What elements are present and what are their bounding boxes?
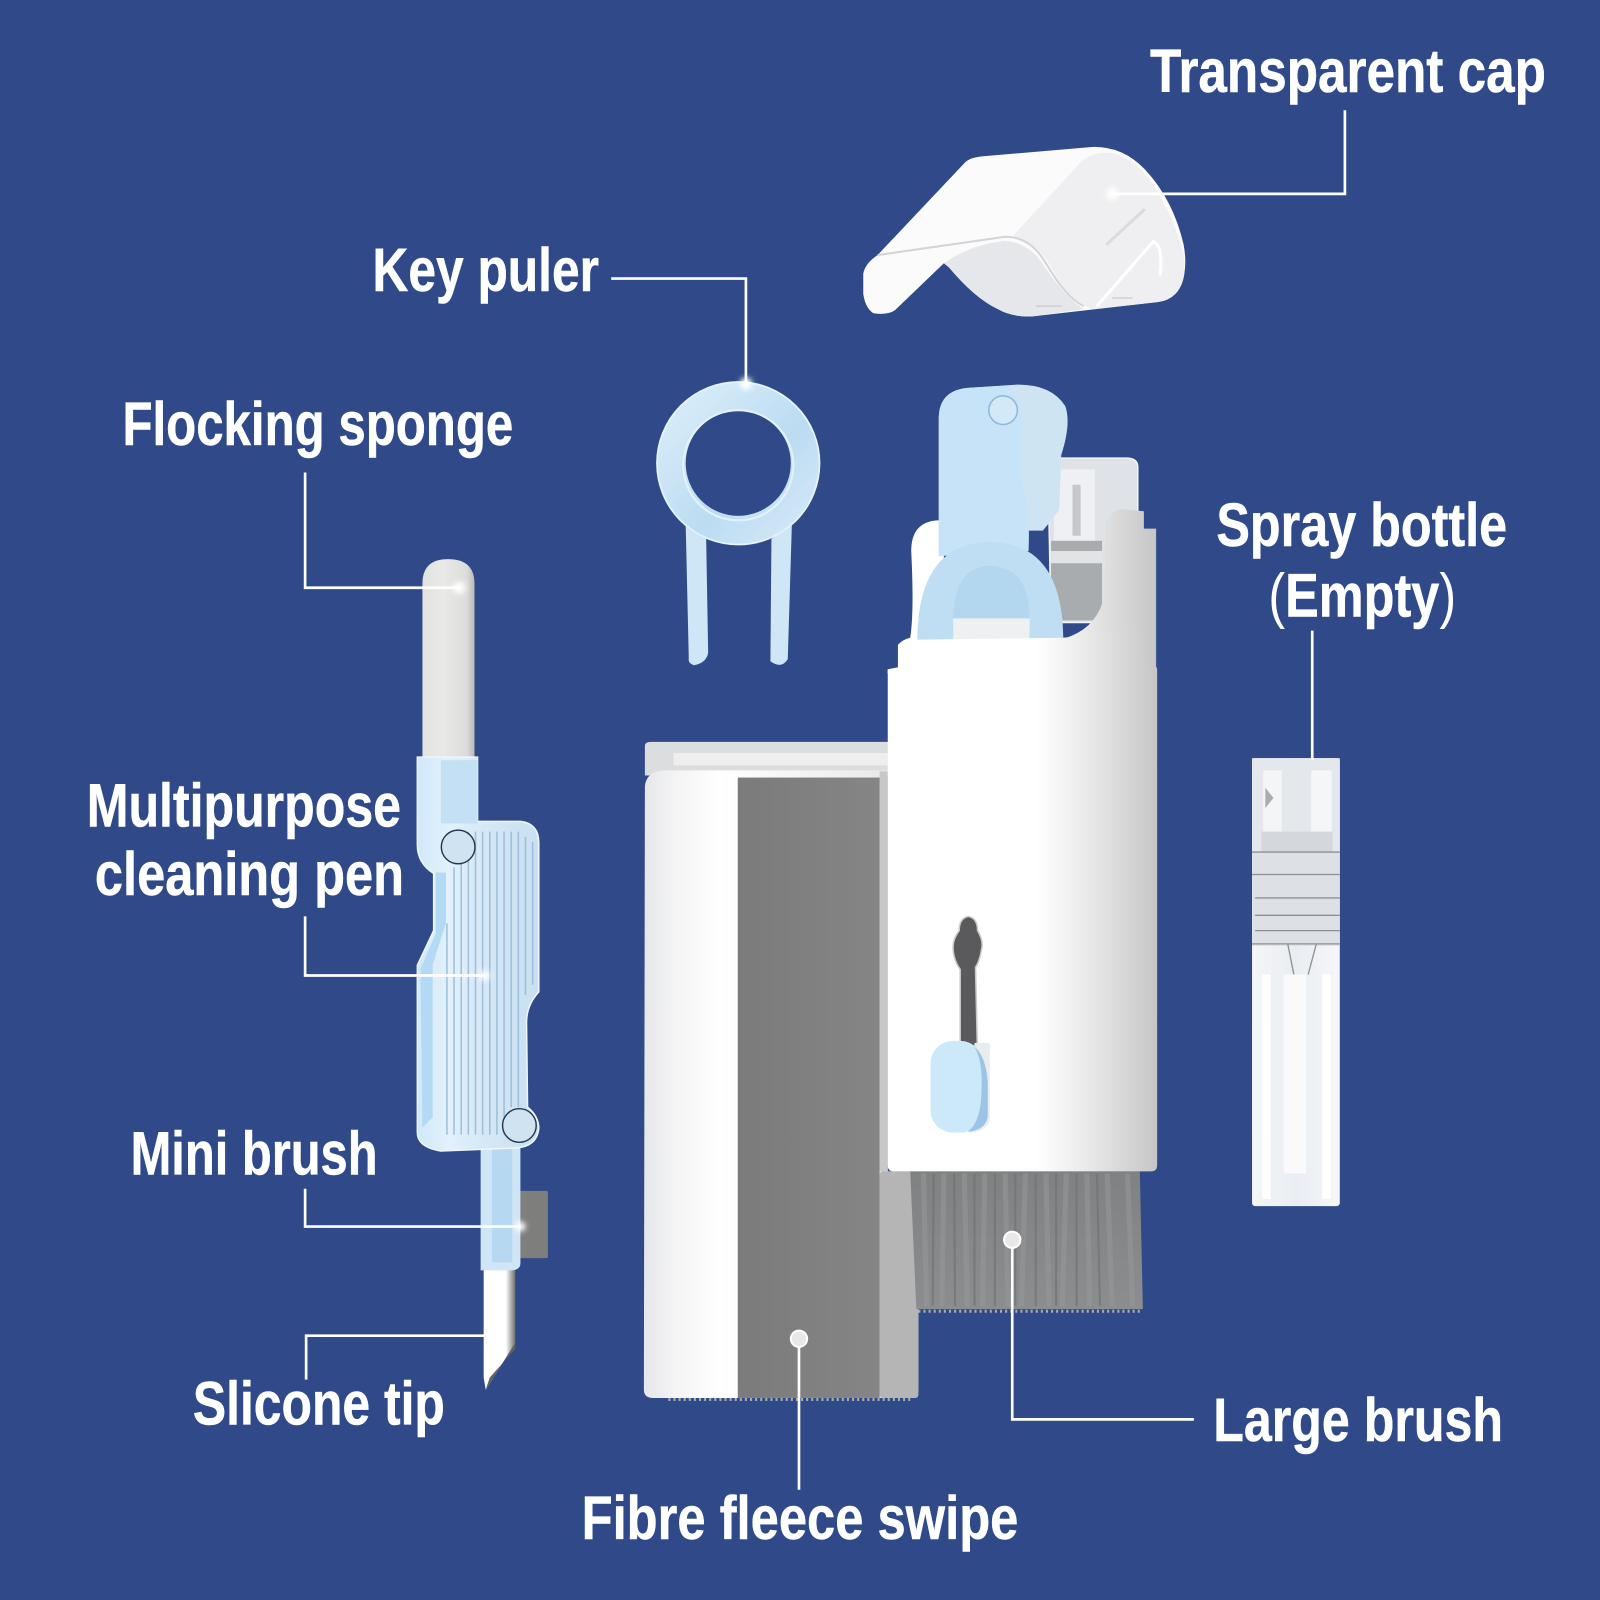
icon: large brush <box>910 1171 1143 1311</box>
case lower body <box>888 665 1157 1171</box>
lower stem <box>481 1143 520 1270</box>
slider slot <box>931 916 990 1133</box>
label: spray bottle <box>1216 491 1507 629</box>
case top band <box>645 742 898 776</box>
icon: fibre fleece case <box>644 742 918 1399</box>
icon: spray bottle inside case <box>1048 458 1138 622</box>
right shade <box>880 771 918 1398</box>
label: mini brush: Mini brush <box>131 1119 378 1187</box>
leader line: key puller <box>611 279 752 390</box>
cap inner underside <box>944 241 1084 316</box>
leader line: silicone tip <box>306 1336 492 1380</box>
icon: transparent cap <box>863 147 1185 316</box>
pen body <box>417 757 539 1151</box>
shelf <box>888 624 1157 673</box>
leader line: spray bottle <box>1311 631 1314 760</box>
label: flocking sponge: Flocking sponge <box>122 390 513 458</box>
case body <box>644 770 918 1398</box>
label: silicone tip: Slicone tip <box>193 1369 445 1437</box>
icon: spray bottle <box>1252 758 1340 1206</box>
fleece fringe <box>668 1398 913 1401</box>
leader line: transparent cap <box>1106 110 1345 200</box>
cap side face <box>1012 153 1185 309</box>
mini brush <box>515 1191 548 1258</box>
pen buttons <box>441 830 536 1142</box>
upper holder <box>888 509 1156 673</box>
silicone tip blade <box>484 1268 515 1390</box>
icon: key puller <box>657 382 819 665</box>
label: multipurpose cleaning pen: cleaning pen <box>95 840 404 908</box>
blue arch handle <box>917 542 1063 641</box>
pen ribs <box>447 832 533 1135</box>
leader line: mini brush <box>305 1189 526 1232</box>
label: spray bottle: (Empty) <box>1268 561 1456 629</box>
leader line: large brush <box>1004 1232 1194 1419</box>
label: multipurpose cleaning pen: Multipurpose <box>87 772 401 840</box>
label: spray bottle: Spray bottle <box>1216 491 1507 559</box>
label: large brush: Large brush <box>1213 1386 1503 1454</box>
leader line: cleaning pen <box>305 916 490 981</box>
label: key puller: Key puler <box>372 236 599 304</box>
label: fibre fleece swipe: Fibre fleece swipe <box>582 1484 1018 1552</box>
flocking sponge tip <box>422 559 474 760</box>
leader line: flocking sponge <box>305 472 465 594</box>
blue pen in holder <box>939 385 1068 556</box>
fleece panel <box>738 778 880 1398</box>
label: multipurpose cleaning pen <box>87 772 404 908</box>
leader line: fibre fleece <box>791 1331 807 1490</box>
icon: multipurpose cleaning pen <box>417 559 548 1390</box>
icon: main case body <box>888 385 1157 1171</box>
